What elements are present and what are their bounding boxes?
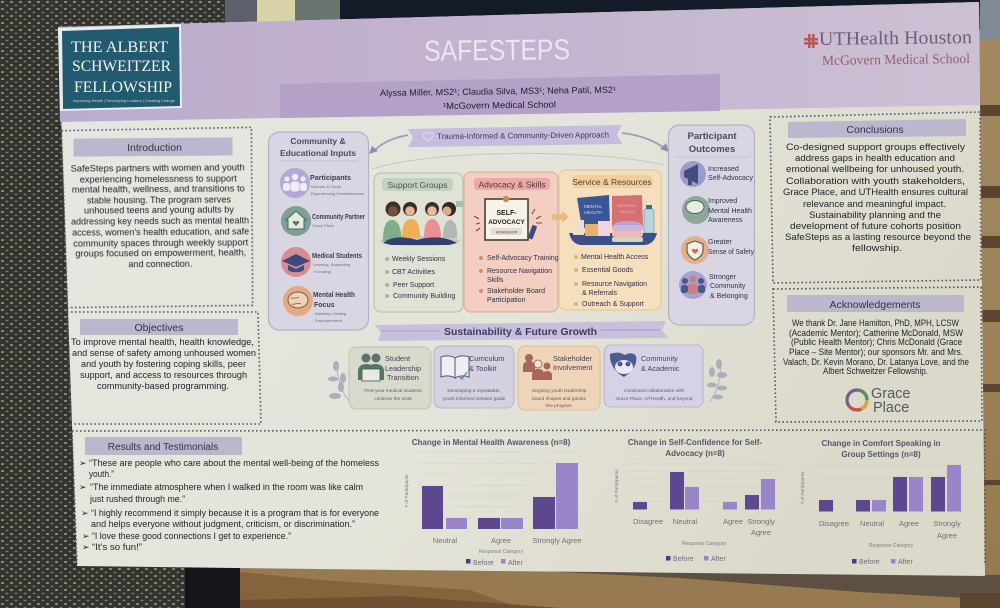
chart: change in comfort speaking in group settings: After bbox=[898, 559, 913, 566]
item: participants bbox=[280, 168, 364, 198]
list: advocacy activities bbox=[479, 255, 559, 304]
logo: Albert Schweitzer Fellowship: FELLOWSHIP bbox=[74, 79, 172, 96]
card: student leadership transition: Leadership bbox=[385, 364, 421, 373]
title: SAFESTEPS bbox=[424, 34, 570, 68]
illustration: self-advocacy workshop clipboard: WORKSHOP bbox=[496, 230, 518, 234]
chart: change in self-confidence for self-advocacy: Advocacy (n=8) bbox=[665, 449, 725, 458]
text: testimonials: “The immediate atmosphere when I walked in the room was like calm bbox=[90, 482, 363, 492]
text: acknowledgements body: (Public Health Mentor); Chris McDonald (Grace bbox=[791, 337, 962, 347]
list: support group activities bbox=[385, 256, 455, 300]
chart: change in comfort speaking in group settings: Disagree bbox=[819, 519, 849, 528]
list: services: Outreach & Support bbox=[582, 301, 644, 308]
list: advocacy activities: Stakeholder Board bbox=[487, 288, 545, 295]
chart: change in mental health awareness bbox=[404, 438, 582, 567]
item: increased self-advocacy bbox=[680, 161, 753, 187]
author bar bbox=[280, 74, 720, 118]
text: acknowledgements body: We thank Dr. Jane Hamilton, PhD, MPH, LCSW bbox=[792, 318, 959, 328]
list: advocacy activities: Skills bbox=[487, 277, 504, 284]
text: introduction body: access, women’s health education, and safe bbox=[72, 226, 249, 239]
illustration: resources tray: HEALTH bbox=[584, 210, 602, 215]
item: medical students: Medical Students bbox=[312, 253, 362, 260]
chart: change in mental health awareness: Change in Mental Health Awareness (n=8) bbox=[412, 438, 571, 447]
text: introduction body: and connection. bbox=[128, 259, 192, 270]
author bar: ¹McGovern Medical School bbox=[443, 99, 556, 111]
icon: house bbox=[281, 206, 311, 236]
item: increased self-advocacy: Self-Advocacy bbox=[708, 175, 753, 182]
list: support group activities: Community Building bbox=[393, 293, 455, 300]
card: curriculum and toolkit: & Toolkit bbox=[469, 364, 496, 373]
card: student leadership transition: Transition bbox=[387, 373, 419, 382]
list: support group activities: Peer Support bbox=[393, 282, 434, 289]
chart: change in comfort speaking in group settings: Change in Comfort Speaking in bbox=[821, 439, 941, 448]
item: improved mental health awareness: Awareness bbox=[708, 217, 743, 224]
text: testimonials: youth.” bbox=[89, 469, 114, 479]
card: stakeholder involvement: the program bbox=[546, 403, 572, 409]
item: mental health focus: Empowerment bbox=[315, 318, 343, 323]
illustration: resources tray: HEALTH bbox=[619, 209, 635, 214]
icon: brain speech bubble bbox=[682, 196, 710, 224]
icon: brain bbox=[283, 286, 313, 316]
heading: participant outcomes: Outcomes bbox=[689, 144, 735, 155]
item: community partner: Community Partner bbox=[312, 214, 365, 221]
card: student leadership transition: First-year medical students bbox=[364, 388, 422, 394]
panel: community and educational inputs bbox=[268, 132, 368, 330]
arrow: support groups to advocacy bbox=[456, 198, 473, 210]
chart: change in self-confidence for self-advocacy: After bbox=[711, 556, 726, 563]
chart: change in comfort speaking in group settings: Strongly bbox=[933, 519, 961, 528]
text: testimonials bbox=[79, 458, 379, 552]
text: conclusions body: Collaboration with youth stakeholders, bbox=[786, 176, 965, 187]
card: curriculum and toolkit: Developing a repeatable, bbox=[447, 388, 501, 394]
card: community and academic: Grace Place, UTHealth, and beyond bbox=[615, 396, 693, 402]
icon: people bbox=[280, 168, 310, 198]
list: support group activities: CBT Activities bbox=[392, 269, 436, 276]
chart: change in self-confidence for self-advocacy: Agree bbox=[723, 517, 743, 526]
heading: acknowledgements: Acknowledgements bbox=[829, 299, 921, 311]
card: stakeholder involvement: board shapes and guides bbox=[532, 396, 587, 402]
text: testimonials: ➢ bbox=[82, 542, 90, 552]
illustration: self-advocacy workshop clipboard bbox=[474, 196, 542, 240]
card: stakeholder involvement bbox=[518, 346, 600, 410]
chart: change in self-confidence for self-advocacy: Agree bbox=[751, 528, 771, 537]
item: stronger community and belonging: & Belonging bbox=[710, 293, 748, 300]
banner: trauma-informed approach bbox=[408, 125, 622, 147]
item: community partner: Grace Place bbox=[312, 223, 335, 228]
logo: UTHealth Houston: McGovern Medical School bbox=[822, 52, 970, 69]
item: participants: Participants bbox=[310, 175, 351, 182]
item: greater sense of safety: Greater bbox=[708, 239, 732, 246]
item: participants: Women & Youth bbox=[311, 184, 341, 189]
banner: trauma-informed approach: Trauma-Informed & Community-Driven Approach bbox=[437, 130, 609, 141]
icon: shield bbox=[681, 236, 709, 264]
text: objectives body: and youth by fostering coping skills, peer bbox=[81, 359, 246, 370]
item: mental health focus bbox=[283, 286, 355, 323]
chart: change in comfort speaking in group settings: Neutral bbox=[860, 519, 884, 528]
card: community and academic: & Academic bbox=[641, 364, 680, 373]
panel: introduction bbox=[61, 127, 253, 308]
chart: change in self-confidence for self-advocacy: Before bbox=[673, 556, 694, 563]
text: testimonials: ➢ bbox=[79, 458, 87, 468]
icon: stakeholders group bbox=[523, 354, 552, 380]
heading: results and testimonials: Results and Testimonials bbox=[108, 442, 218, 453]
chart: change in mental health awareness: Before bbox=[473, 560, 494, 567]
text: acknowledgements body: Valach, Dr. Kevin Morano, Dr. Latanya Love, and the bbox=[783, 357, 969, 367]
chart: change in comfort speaking in group settings: Response Category bbox=[869, 543, 914, 549]
text: introduction body: addressing key needs such as mental health bbox=[71, 215, 249, 228]
text: conclusions body bbox=[783, 142, 971, 254]
text: objectives body: support, and access to resources through bbox=[80, 370, 247, 381]
text: objectives body: To improve mental health, health knowledge, bbox=[71, 337, 254, 348]
icon: community heart bbox=[610, 353, 636, 377]
panel: advocacy and skills bbox=[464, 172, 559, 312]
panel: service and resources bbox=[559, 170, 661, 310]
text: testimonials: and helps everyone without judgment, criticism, or discrimination.” bbox=[91, 519, 355, 529]
logo: Albert Schweitzer Fellowship: Improving Health | Developing Leaders | Creating Change bbox=[73, 99, 175, 103]
card: stakeholder involvement: Stakeholder bbox=[553, 354, 593, 363]
illustration: self-advocacy workshop clipboard: SELF- bbox=[496, 210, 517, 217]
text: conclusions body: emotional wellbeing for unhoused youth. bbox=[786, 164, 964, 175]
panel: acknowledgements bbox=[773, 287, 982, 422]
arrow: banner to inputs bbox=[369, 135, 408, 154]
icon: two readers with book bbox=[358, 354, 384, 381]
logo: Grace Place bbox=[847, 386, 910, 416]
text: testimonials: “I love these good connections I get to experience.” bbox=[92, 531, 291, 541]
card: curriculum and toolkit bbox=[434, 346, 514, 408]
panel: support groups bbox=[374, 173, 463, 312]
chart: change in self-confidence for self-advocacy: Response Category bbox=[682, 541, 727, 547]
text: introduction body: unhoused teens and young adults by bbox=[84, 204, 234, 217]
illustration: resources tray: WOMEN'S bbox=[617, 203, 637, 208]
chart: change in comfort speaking in group settings: Before bbox=[859, 559, 880, 566]
list: services: Essential Goods bbox=[582, 267, 633, 274]
text: conclusions body: SafeSteps as a lasting resource beyond the bbox=[785, 232, 971, 243]
author bar: Alyssa Miller, MS2¹; Claudia Silva, MS3¹; Neha Patil, MS2¹ bbox=[380, 85, 616, 98]
logo: Albert Schweitzer Fellowship: SCHWEITZER bbox=[72, 58, 172, 75]
item: greater sense of safety: Sense of Safety bbox=[708, 249, 754, 256]
text: introduction body: stable housing. The program serves bbox=[87, 194, 231, 206]
list: services: & Referrals bbox=[582, 290, 618, 297]
chart: change in self-confidence for self-advocacy: Disagree bbox=[633, 517, 663, 526]
item: mental health focus: Wellness, Healing bbox=[315, 311, 346, 316]
list: services: Resource Navigation bbox=[582, 281, 647, 288]
item: medical students bbox=[281, 247, 362, 277]
heading: objectives: Objectives bbox=[134, 322, 184, 334]
panel: conclusions bbox=[770, 112, 981, 283]
heading: conclusions: Conclusions bbox=[846, 124, 904, 136]
heading: objectives bbox=[80, 319, 238, 335]
card: community and academic bbox=[604, 345, 703, 407]
item: community partner bbox=[281, 206, 365, 236]
arrow: advocacy to services bbox=[552, 211, 569, 223]
item: participants: Experiencing Homelessness bbox=[311, 191, 364, 196]
heading: community and educational inputs: Educational Inputs bbox=[280, 148, 356, 158]
text: introduction body: groups focused on empowerment, health, bbox=[75, 247, 246, 260]
text: conclusions body: fellowship. bbox=[852, 243, 902, 254]
text: conclusions body: relevance and meaningful impact. bbox=[803, 199, 946, 210]
card: stakeholder involvement: Ongoing youth leadership bbox=[532, 388, 587, 394]
chart: change in comfort speaking in group settings: # of Participants bbox=[800, 471, 805, 504]
list: support group activities: Weekly Sessions bbox=[392, 256, 446, 263]
heading: participant outcomes bbox=[687, 131, 737, 155]
icon: megaphone bbox=[680, 161, 706, 187]
item: mental health focus: Focus bbox=[314, 302, 335, 309]
chart: change in mental health awareness: Agree bbox=[491, 536, 511, 545]
chart: change in self-confidence for self-advocacy: Change in Self-Confidence for Self- bbox=[628, 438, 762, 447]
item: increased self-advocacy: Increased bbox=[708, 166, 739, 173]
icon: UTHealth cross bbox=[804, 34, 818, 48]
text: conclusions body: Sustainability planning and the bbox=[809, 210, 941, 221]
illustration: resources tray: MENTAL bbox=[584, 204, 602, 209]
panel: results and testimonials bbox=[72, 430, 985, 565]
item: stronger community and belonging: Stronger bbox=[709, 274, 737, 281]
heading: participant outcomes: Participant bbox=[687, 131, 737, 142]
text: objectives body: and sense of safety among unhoused women bbox=[72, 348, 256, 359]
icon: open book bbox=[441, 356, 469, 379]
card: student leadership transition: continue the work bbox=[374, 396, 412, 402]
logo: Grace Place: Grace bbox=[871, 386, 910, 402]
logo: UTHealth Houston: UTHealth Houston bbox=[819, 27, 973, 50]
chart: change in mental health awareness: Strongly Agree bbox=[532, 536, 582, 545]
chart: change in mental health awareness: # of Participants bbox=[404, 474, 409, 507]
chart: change in comfort speaking in group settings: Agree bbox=[899, 519, 919, 528]
chart: change in self-confidence for self-advocacy: Neutral bbox=[673, 517, 697, 526]
logo: Albert Schweitzer Fellowship: THE ALBERT bbox=[71, 39, 169, 56]
list: services bbox=[574, 254, 649, 308]
text: introduction body: mental health, wellness, and transitions to bbox=[72, 183, 245, 196]
item: mental health focus: Mental Health bbox=[313, 292, 355, 299]
list: services: Mental Health Access bbox=[581, 254, 649, 261]
heading: community and educational inputs bbox=[280, 136, 356, 158]
heading: conclusions bbox=[788, 119, 966, 138]
heading: community and educational inputs: Community & bbox=[290, 136, 346, 146]
decoration: right leaf sprig bbox=[707, 359, 727, 402]
chart: change in self-confidence for self-advocacy: Strongly bbox=[747, 517, 775, 526]
logo: Grace Place: Place bbox=[873, 400, 909, 416]
panel: participant outcomes bbox=[668, 125, 754, 325]
text: objectives body: community-based programming. bbox=[97, 381, 229, 392]
text: acknowledgements body: Place – Site Mentor); our sponsors Mr. and Mrs. bbox=[789, 347, 963, 357]
item: stronger community and belonging bbox=[679, 271, 748, 300]
text: conclusions body: address gaps in health education and bbox=[795, 153, 955, 164]
text: conclusions body: development of future cohorts position bbox=[790, 221, 961, 232]
panel: objectives bbox=[67, 312, 261, 424]
text: testimonials: ➢ bbox=[81, 508, 89, 518]
card: curriculum and toolkit: Curriculum bbox=[469, 354, 504, 363]
arrow: banner to outcomes bbox=[622, 133, 669, 152]
text: conclusions body: Co-designed support groups effectively bbox=[786, 142, 965, 153]
item: improved mental health awareness: Improved bbox=[708, 198, 737, 205]
text: acknowledgements body: Albert Schweitzer Fellowship. bbox=[823, 366, 928, 376]
text: testimonials: ➢ bbox=[82, 531, 90, 541]
chart: change in mental health awareness: Response Category bbox=[479, 549, 524, 555]
card: stakeholder involvement: Involvement bbox=[553, 363, 592, 372]
text: testimonials: “It’s so fun!” bbox=[92, 542, 142, 552]
banner: sustainability and future growth: Sustainability & Future Growth bbox=[444, 327, 597, 338]
list: advocacy activities: Participation bbox=[487, 297, 526, 304]
icon: heart bbox=[422, 133, 434, 141]
chart: change in self-confidence for self-advocacy bbox=[614, 438, 778, 563]
list: advocacy activities: Resource Navigation bbox=[487, 268, 552, 275]
banner: sustainability and future growth bbox=[375, 321, 668, 341]
text: acknowledgements body: (Academic Mentor); Catherine McDonald, MSW bbox=[789, 328, 963, 338]
logo: UTHealth Houston bbox=[804, 27, 973, 69]
list: advocacy activities: Self-Advocacy Training bbox=[487, 255, 559, 262]
heading: support groups: Support Groups bbox=[387, 180, 448, 190]
text: introduction body: SafeSteps partners with women and youth bbox=[71, 162, 245, 175]
card: student leadership transition: Student bbox=[385, 354, 410, 363]
card: curriculum and toolkit: youth-informed session guide bbox=[443, 396, 506, 402]
chart: change in comfort speaking in group settings bbox=[800, 439, 964, 566]
icon: community people bbox=[679, 271, 707, 299]
text: introduction body: experiencing homelessness to support bbox=[80, 173, 237, 186]
item: improved mental health awareness bbox=[682, 196, 752, 224]
logo: Albert Schweitzer Fellowship bbox=[58, 24, 182, 111]
decoration: left leaf sprig bbox=[328, 361, 350, 402]
item: improved mental health awareness: Mental Health bbox=[708, 208, 752, 215]
item: medical students: +Growing bbox=[313, 269, 331, 274]
heading: introduction bbox=[73, 137, 233, 157]
chart: change in mental health awareness: Neutral bbox=[433, 536, 457, 545]
chart: change in comfort speaking in group settings: Group Settings (n=8) bbox=[841, 450, 921, 459]
icon: graduation cap bbox=[281, 247, 311, 277]
text: testimonials: “I highly recommend it simply because it is a program that is for everyone bbox=[91, 508, 379, 518]
chart: change in mental health awareness: After bbox=[508, 560, 523, 567]
illustration: self-advocacy workshop clipboard: ADVOCACY bbox=[488, 219, 526, 226]
text: testimonials: ➢ bbox=[79, 482, 87, 492]
heading: results and testimonials bbox=[85, 437, 242, 455]
text: objectives body bbox=[71, 337, 256, 392]
chart: change in comfort speaking in group settings: Agree bbox=[937, 531, 957, 540]
text: conclusions body: Grace Place, and UTHealth ensures cultural bbox=[783, 187, 968, 198]
item: greater sense of safety bbox=[681, 236, 754, 264]
heading: acknowledgements bbox=[787, 295, 964, 312]
item: medical students: Learning, Supporting bbox=[313, 262, 350, 267]
text: introduction body bbox=[71, 162, 249, 271]
illustration: four women sitting in a group bbox=[380, 202, 460, 246]
text: testimonials: “These are people who care about the mental well-being of the homeless bbox=[89, 458, 379, 468]
card: community and academic: Community bbox=[641, 354, 678, 363]
text: testimonials: just rushed through me.” bbox=[89, 494, 185, 504]
item: stronger community and belonging: Community bbox=[710, 283, 746, 290]
heading: introduction: Introduction bbox=[127, 142, 182, 154]
chart: change in self-confidence for self-advocacy: # of Participants bbox=[614, 469, 619, 502]
card: student leadership transition bbox=[349, 347, 431, 409]
card: community and academic: Continued collaboration with bbox=[624, 388, 684, 394]
text: introduction body: community spaces through weekly support bbox=[73, 237, 249, 250]
heading: advocacy and skills: Advocacy & Skills bbox=[478, 180, 546, 190]
text: acknowledgements body bbox=[783, 318, 969, 376]
illustration: resources tray bbox=[569, 195, 657, 245]
heading: service and resources: Service & Resources bbox=[572, 177, 652, 187]
